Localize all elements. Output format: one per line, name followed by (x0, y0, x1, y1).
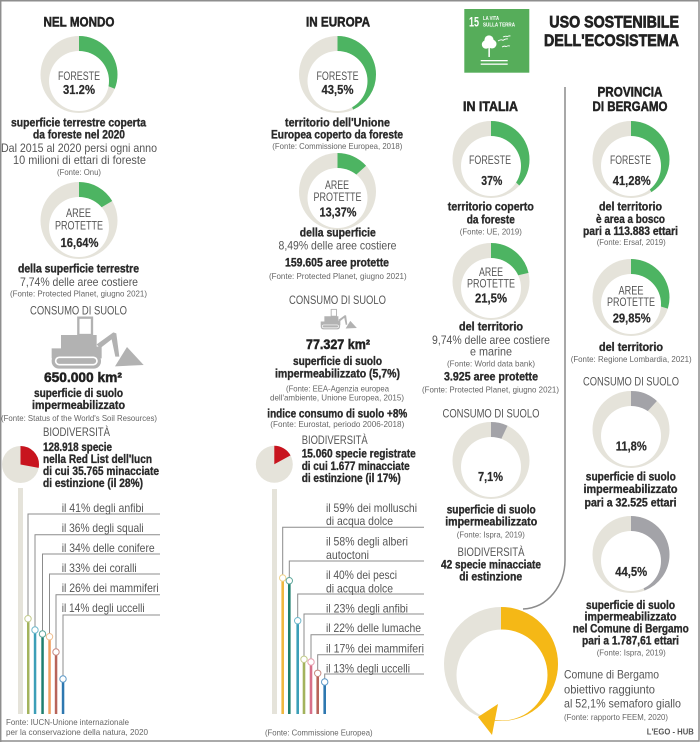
pie: biodiversità europa 17% (256, 446, 293, 483)
text: consumo di suolo provincia (584, 470, 678, 510)
title (544, 13, 679, 50)
text: biodiversità mondo: nella Red List dell'Iucn (43, 452, 152, 466)
donut: aree protette mondo 16,64%: 16,64% (60, 235, 99, 250)
text: foreste mondo: (Fonte: Onu) (57, 167, 101, 177)
donut: consumo di suolo provincia 11,8% (592, 391, 670, 468)
text: biodiversità europa (302, 432, 416, 485)
text: foreste mondo: 10 milioni di ettari di foreste (13, 153, 146, 167)
donut: aree protette europa 13,37%: PROTETTE (314, 190, 362, 204)
text: consumo di suolo italia: (Fonte: Ispra, 2019) (457, 530, 525, 540)
title: USO SOSTENIBILE (549, 13, 679, 31)
text: aree protette mondo: 7,74% delle aree costiere (20, 275, 138, 289)
text: aree protette bergamo (571, 340, 692, 364)
text: aree protette italia: (Fonte: World data bank) (447, 359, 535, 369)
source: mondo: Fonte: IUCN-Unione internazionale (6, 717, 129, 727)
text: consumo di suolo europa: (Fonte: EEA-Agenzia europea (286, 384, 389, 394)
text: biodiversità europa: 15.060 specie registrate (302, 447, 416, 461)
chart: specie minacciate europa: il 17% dei mammiferi (326, 641, 424, 655)
heading: consumo di suolo europa: CONSUMO DI SUOLO (289, 293, 386, 307)
panel: provincia di bergamo (571, 84, 692, 658)
text: consumo di suolo comune: superficie di suolo (586, 598, 675, 612)
text: biodiversità mondo: BIODIVERSITÀ (43, 424, 110, 439)
text: foreste bergamo: è area a bosco (596, 212, 665, 226)
chart: specie minacciate europa: il 23% degli anfibi (326, 601, 408, 615)
text: foreste bergamo: (Fonte: Ersaf, 2019) (597, 237, 666, 247)
text: consumo di suolo europa: indice consumo di suolo +8% (267, 407, 408, 421)
donut: consumo di suolo provincia 11,8%: 11,8% (616, 439, 647, 454)
text: foreste mondo (1, 116, 157, 177)
donut: aree protette italia 21,5% (452, 243, 530, 320)
text: consumo di suolo europa (267, 336, 408, 429)
chart: specie minacciate mondo: il 33% dei coralli (62, 561, 137, 575)
donut: foreste italia 37% (452, 121, 530, 198)
chart: specie minacciate europa (272, 489, 424, 714)
donut: aree protette mondo 16,64% (40, 182, 118, 259)
title: DELL'ECOSISTEMA (544, 32, 679, 50)
donut: consumo di suolo comune 44,5% (592, 516, 670, 593)
donut: foreste bergamo 41,28%: FORESTE (610, 153, 651, 167)
donut: aree protette europa 13,37%: 13,37% (320, 205, 357, 220)
icon: SDG 15 la vita sulla terra: 15 (469, 14, 479, 30)
text: foreste europa: Europea coperto da foreste (271, 128, 403, 142)
donut: aree protette mondo 16,64%: PROTETTE (55, 218, 103, 232)
donut: aree protette bergamo 29,85%: PROTETTE (607, 295, 655, 309)
chart: specie minacciate europa: il 13% degli uccelli (326, 661, 410, 675)
text: obiettivo comune di bergamo: Comune di Bergamo (564, 667, 659, 681)
text: obiettivo comune di bergamo: al 52,1% semaforo giallo (564, 697, 681, 711)
text: aree protette italia: 3.925 aree protette (444, 370, 538, 384)
donut: aree protette bergamo 29,85%: 29,85% (613, 310, 651, 325)
text: aree protette mondo: della superficie terrestre (18, 262, 139, 276)
text: aree protette mondo: (Fonte: Protected Planet, giugno 2021) (10, 289, 147, 299)
text: obiettivo comune di bergamo: obiettivo raggiunto (564, 682, 655, 696)
text: foreste italia: territorio coperto (448, 200, 534, 214)
chart: specie minacciate europa: autoctoni (326, 548, 369, 562)
text: aree protette europa: (Fonte: Protected Planet, giugno 2021) (269, 271, 407, 281)
text: foreste europa (271, 116, 403, 151)
panel: nel mondo (1, 14, 160, 737)
donut: aree protette europa 13,37%: AREE (325, 178, 349, 192)
text: biodiversità italia: di estinzione (459, 570, 522, 584)
text: consumo di suolo europa: superficie di suolo (293, 354, 382, 368)
donut: consumo di suolo comune 44,5%: 44,5% (615, 564, 648, 579)
text: foreste italia: da foreste (467, 212, 515, 226)
heading: consumo di suolo italia: CONSUMO DI SUOLO (442, 406, 540, 420)
text: biodiversità mondo: di cui 35.765 minacciate (43, 464, 159, 478)
text: aree protette europa: 159.605 aree protette (285, 256, 389, 270)
donut: foreste europa 43,5% (299, 36, 376, 113)
text: biodiversità mondo: di estinzione (il 28%) (43, 476, 143, 490)
icon: SDG 15 la vita sulla terra: SULLA TERRA (483, 22, 515, 28)
text: consumo di suolo europa: impermeabilizzato (5,7%) (275, 367, 400, 381)
text: foreste mondo: da foreste nel 2020 (33, 128, 125, 142)
donut: foreste europa 43,5%: 43,5% (322, 82, 354, 97)
chart: specie minacciate europa: di acqua dolce (326, 581, 393, 595)
panel: in italia (422, 98, 559, 584)
chart: specie minacciate mondo: il 26% dei mammiferi (62, 581, 159, 595)
text: biodiversità mondo: 128.918 specie (43, 440, 112, 454)
text: consumo di suolo comune: impermeabilizzato (584, 610, 676, 624)
donut: aree protette mondo 16,64%: AREE (66, 206, 91, 220)
donut: aree protette bergamo 29,85%: AREE (618, 283, 644, 297)
text: obiettivo comune di bergamo: (Fonte: rapporto FEEM, 2020) (564, 712, 668, 722)
text: foreste mondo: Dal 2015 al 2020 persi ogni anno (1, 141, 157, 155)
donut: foreste europa 43,5%: FORESTE (316, 69, 358, 83)
text: aree protette italia: 9,74% delle aree costiere (432, 333, 550, 347)
icon: bulldozer (52, 318, 144, 369)
heading: in europa: IN EUROPA (306, 14, 370, 30)
text: aree protette bergamo: del territorio (599, 340, 663, 354)
text: consumo di suolo provincia: impermeabilizzato (584, 482, 678, 496)
heading: in italia: IN ITALIA (463, 98, 518, 114)
pie: biodiversità mondo 28% (2, 446, 39, 483)
donut: foreste mondo 31,2% (40, 36, 118, 113)
text: biodiversità mondo (43, 424, 159, 490)
icon: SDG 15 la vita sulla terra (464, 9, 529, 73)
source: europa: (Fonte: Commissione Europea) (265, 728, 373, 738)
text: consumo di suolo provincia: superficie di suolo (586, 470, 676, 484)
donut: foreste mondo 31,2%: FORESTE (58, 69, 100, 83)
text: consumo di suolo mondo (1, 369, 157, 423)
text: consumo di suolo europa: dell'ambiente, Unione Europea, 2015) (270, 392, 404, 402)
text: aree protette mondo (10, 262, 147, 299)
donut: foreste italia 37%: 37% (481, 173, 503, 188)
text: consumo di suolo europa: (Fonte: Eurostat, periodo 2006-2018) (270, 419, 404, 429)
chart: specie minacciate mondo: il 34% delle conifere (62, 541, 155, 555)
text: aree protette italia: (Fonte: Protected Planet, giugno 2021) (422, 385, 559, 395)
chart: specie minacciate europa: il 58% degli alberi (326, 535, 408, 549)
text: foreste mondo: superficie terrestre coperta (11, 116, 146, 130)
text: consumo di suolo mondo: superficie di suolo (34, 386, 123, 400)
donut: foreste italia 37%: FORESTE (469, 153, 511, 167)
chart: specie minacciate europa: di acqua dolce (326, 514, 393, 528)
donut: aree protette europa 13,37% (299, 153, 376, 230)
donut: aree protette italia 21,5%: AREE (479, 265, 503, 279)
divider arrow line (523, 87, 565, 609)
text: aree protette italia: e marine (470, 345, 512, 359)
text: consumo di suolo provincia: pari a 32.525 ettari (584, 496, 676, 510)
text: foreste italia (448, 200, 534, 236)
donut: aree protette bergamo 29,85% (592, 259, 670, 336)
donut: consumo di suolo italia 7,1% (452, 422, 530, 499)
donut: obiettivo comune di bergamo 52,1% con freccia (444, 607, 558, 735)
text: consumo di suolo comune (573, 598, 689, 658)
text: aree protette italia: del territorio (459, 320, 523, 334)
text: consumo di suolo mondo: impermeabilizzato (32, 398, 125, 412)
text: consumo di suolo europa: 77.327 km² (306, 336, 370, 352)
donut: foreste bergamo 41,28% (592, 121, 670, 198)
text: consumo di suolo mondo: (Fonte: Status of the World's Soil Resources) (1, 413, 157, 423)
heading: consumo di suolo mondo: CONSUMO DI SUOLO (30, 303, 127, 317)
chart: specie minacciate mondo: il 36% degli squali (62, 521, 144, 535)
credit: L'EGO - HUB (647, 727, 694, 736)
text: obiettivo comune di bergamo (564, 667, 681, 722)
source: mondo (6, 717, 148, 737)
donut: foreste bergamo 41,28%: 41,28% (613, 173, 651, 188)
donut: aree protette italia 21,5%: PROTETTE (467, 277, 515, 291)
donut: foreste mondo 31,2%: 31.2% (63, 82, 95, 97)
text: biodiversità europa: BIODIVERSITÀ (302, 432, 368, 447)
text: consumo di suolo comune: pari a 1.787,61 ettari (582, 633, 679, 647)
text: aree protette italia (422, 320, 559, 395)
text: foreste europa: territorio dell'Unione (285, 116, 390, 130)
text: foreste bergamo: del territorio (599, 200, 662, 214)
text: foreste europa: (Fonte: Commissione Europea, 2018) (272, 141, 402, 151)
heading: provincia di bergamo: DI BERGAMO (592, 98, 668, 114)
icon: SDG 15 la vita sulla terra: LA VITA (483, 16, 499, 22)
text: foreste bergamo: pari a 113.883 ettari (583, 224, 678, 238)
source: mondo: per la conservazione della natura, 2020 (6, 727, 148, 737)
text: biodiversità italia: BIODIVERSITÀ (458, 544, 524, 559)
heading: provincia di bergamo: PROVINCIA (598, 84, 662, 100)
text: aree protette europa: della superficie (300, 226, 376, 240)
text: consumo di suolo italia (445, 502, 537, 540)
text: aree protette europa: 8,49% delle aree costiere (278, 239, 397, 253)
donut: consumo di suolo italia 7,1%: 7,1% (478, 469, 503, 484)
text: consumo di suolo italia: impermeabilizzato (445, 515, 537, 529)
chart: specie minacciate mondo (18, 488, 160, 714)
panel: in europa (256, 14, 424, 738)
text: biodiversità italia (441, 544, 541, 584)
heading: provincia di bergamo (592, 84, 668, 114)
text: biodiversità europa: di estinzione (il 17%) (302, 471, 401, 485)
chart: specie minacciate europa: il 22% delle lumache (326, 621, 421, 635)
chart: specie minacciate mondo: il 14% degli uccelli (62, 601, 145, 615)
text: aree protette europa (269, 226, 407, 281)
text: consumo di suolo mondo: 650.000 km² (44, 369, 122, 385)
text: biodiversità europa: di cui 1.677 minacciate (302, 459, 410, 473)
chart: specie minacciate mondo: il 41% degli anfibi (62, 501, 144, 515)
text: foreste italia: (Fonte: UE, 2019) (460, 226, 522, 236)
chart: specie minacciate europa: il 59% dei molluschi (326, 501, 417, 515)
text: consumo di suolo italia: superficie di suolo (447, 502, 536, 516)
heading: nel mondo: NEL MONDO (44, 14, 115, 30)
text: biodiversità italia: 42 specie minacciate (441, 557, 541, 571)
icon: bulldozer piccolo (321, 309, 357, 329)
text: foreste bergamo (583, 200, 678, 247)
donut: aree protette italia 21,5%: 21,5% (475, 291, 507, 306)
chart: specie minacciate europa: il 40% dei pesci (326, 568, 397, 582)
text: consumo di suolo comune: (Fonte: Ispra, 2019) (597, 648, 666, 658)
text: aree protette bergamo: (Fonte: Regione Lombardia, 2021) (571, 354, 692, 364)
